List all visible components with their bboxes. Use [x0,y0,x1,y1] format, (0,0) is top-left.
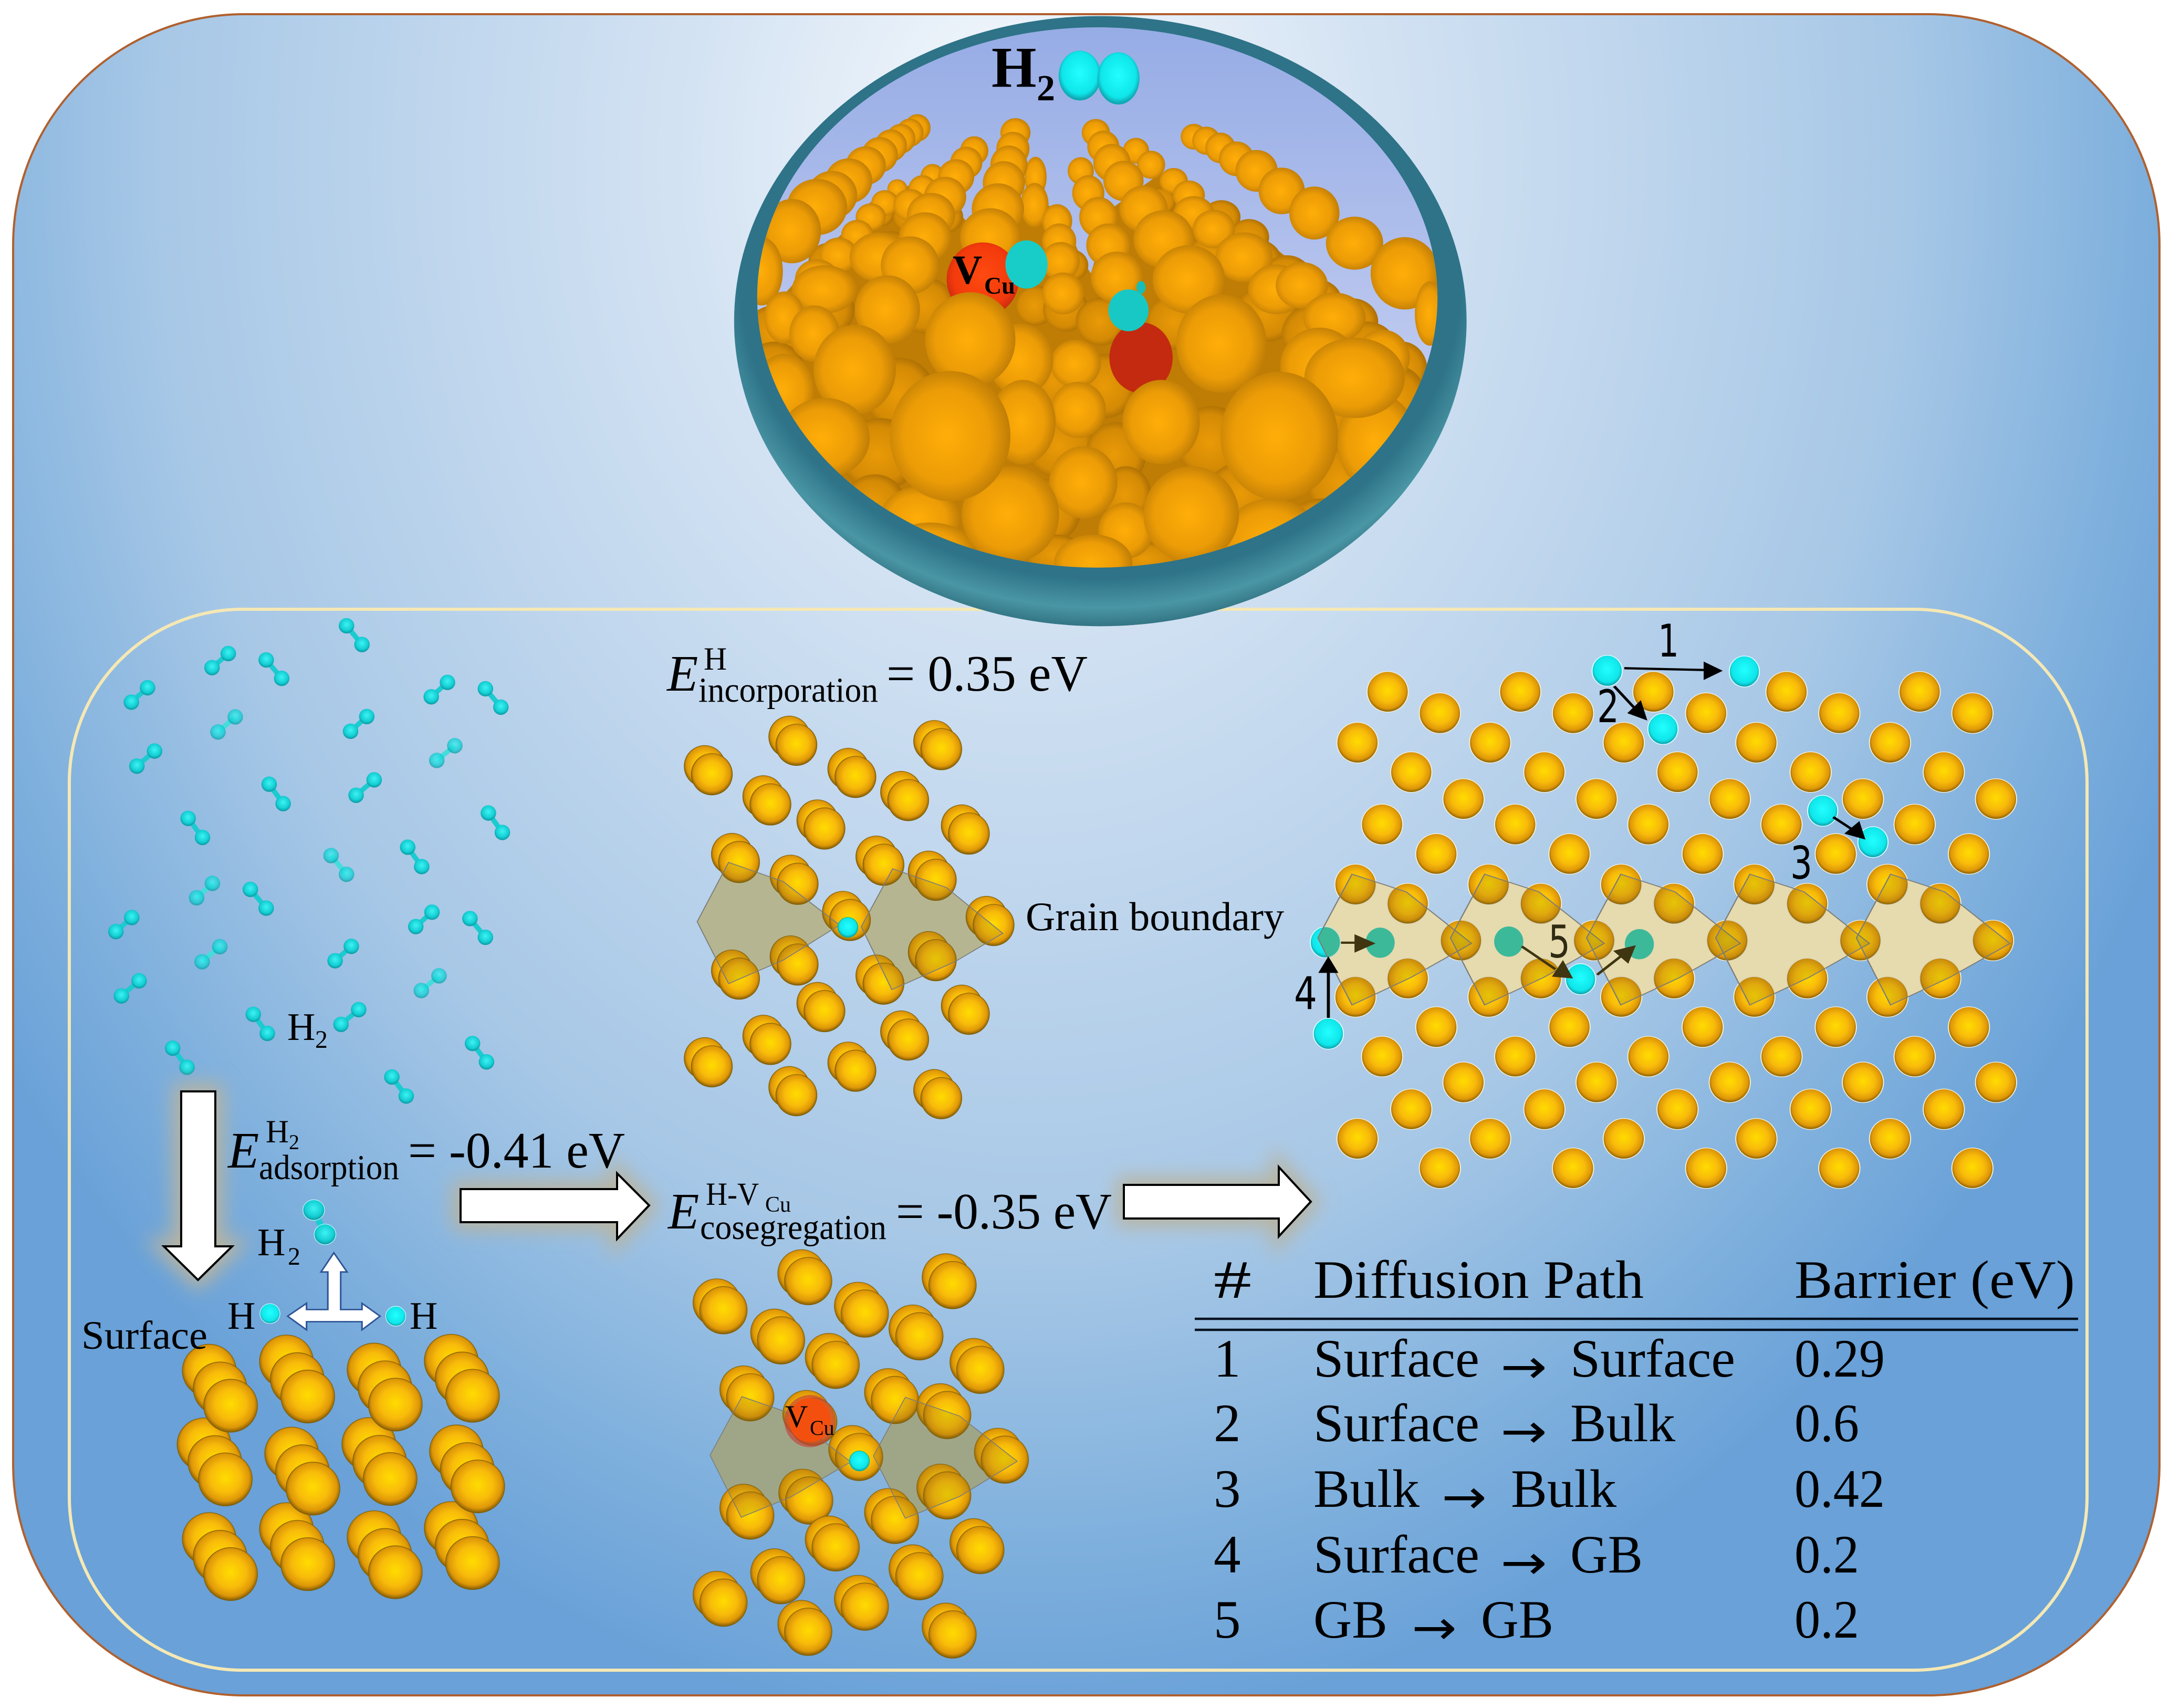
formula: cosegregation energy: E [667,1183,699,1240]
dissociated H atoms [260,1304,406,1326]
row 1: → [1500,1339,1547,1394]
surface slab [177,1200,505,1601]
row 3 [1214,1459,1885,1525]
row 2: 0.6 [1795,1393,1859,1453]
formula: adsorption energy: 2 [289,1130,299,1154]
formula: adsorption energy: adsorption [259,1148,399,1187]
table header: Barrier (eV) [1795,1250,2075,1310]
row 1 [1214,1329,1885,1394]
hydrogen atoms on paths [1313,655,1888,1049]
row 5: → [1412,1600,1457,1655]
row 4 [1214,1525,1859,1590]
formula: cosegregation energy [667,1177,1112,1247]
row 1: Surface [1313,1329,1479,1389]
T-shaped dissociation arrow [288,1253,380,1330]
lens label V_Cu: Cu [984,272,1015,299]
lens ring [734,16,1467,626]
label H2 gas [287,1006,328,1054]
table header [1214,1250,2075,1310]
row 5: GB [1313,1590,1387,1650]
hydrogen atoms in grain boundary [1310,926,1654,959]
copper atoms [177,1334,505,1601]
row 4: 4 [1214,1525,1240,1585]
arrow: gas to surface [164,1091,232,1280]
formula: incorporation energy: = 0.35 eV [886,645,1088,702]
row 3: Bulk [1511,1459,1616,1519]
diffusion arrows [1318,662,1865,1018]
formula: adsorption energy: = -0.41 eV [408,1122,625,1179]
label H right: H [410,1295,437,1338]
label H left: H [227,1295,255,1338]
lens: copper surface close-up [734,16,1467,626]
copper atoms [684,716,1014,1119]
vacancy cosegregation structure [693,1249,1029,1658]
label H2 gas: H [287,1006,315,1049]
diffusion lattice [1310,655,2017,1189]
label H2 at surface [257,1221,300,1270]
diffusion table [1195,1250,2078,1655]
formula: incorporation energy: incorporation [698,671,878,710]
formula: cosegregation energy: = -0.35 eV [896,1183,1112,1240]
lens label H2: H [992,35,1037,99]
grain boundary polygons [697,862,1003,990]
lens label H2: 2 [1037,68,1055,109]
arrow: cosegregation to diffusion [1124,1167,1311,1236]
row 4: GB [1570,1525,1643,1585]
lens label V_Cu [953,247,1015,299]
row 1: 0.29 [1795,1329,1885,1389]
row 3: 0.42 [1795,1459,1885,1519]
table header: Diffusion Path [1313,1250,1644,1310]
grain boundary polygon base [710,1397,1017,1518]
formula: incorporation energy [666,642,1088,710]
inner panel border [69,609,2087,1670]
formula: adsorption energy [227,1115,625,1187]
row 4: → [1500,1535,1547,1590]
formula: incorporation energy: E [666,645,698,702]
row 4: 0.2 [1795,1525,1859,1585]
row 3: Bulk [1313,1459,1420,1519]
formula: adsorption energy: H [266,1115,289,1150]
row 5 [1214,1590,1859,1655]
row 5: 5 [1214,1590,1240,1650]
label surface: Surface [81,1314,207,1358]
row 3: 3 [1214,1459,1240,1519]
vacancy atom [785,1395,836,1447]
grain boundary polygons [1318,874,2010,1005]
table header: # [1214,1250,1251,1310]
row 2: → [1500,1404,1547,1459]
row 5: 0.2 [1795,1590,1859,1650]
hydrogen bond stub [1136,281,1145,294]
red vacancy atom lower [1109,322,1173,393]
hydrogen atom upper [1005,241,1048,288]
row 1: Surface [1570,1329,1735,1389]
grain boundary incorporation structure [684,716,1014,1119]
small H2 molecule [303,1200,336,1245]
row 4: Surface [1313,1525,1479,1585]
lens label H2 [992,35,1055,109]
copper atoms [1335,672,2017,1189]
arrow: adsorption to cosegregation [461,1173,649,1239]
label V_Cu: Cu [810,1416,834,1440]
table rules [1195,1319,2078,1330]
H2 gas molecules [108,618,510,1104]
path number 3: 3 [1790,837,1812,890]
lens label V_Cu: V [953,247,982,293]
path number 4: 4 [1294,967,1317,1020]
red vacancy atom upper [946,242,1019,316]
row 3: → [1442,1470,1487,1525]
row 2: Bulk [1570,1393,1675,1453]
copper atoms [693,1249,1029,1658]
label V_Cu: V [785,1399,808,1434]
formula: cosegregation energy: Cu [765,1193,791,1217]
formula: adsorption energy: E [227,1122,259,1179]
row 2: 2 [1214,1393,1240,1453]
H2 molecule in lens [1059,50,1140,105]
row 5: GB [1481,1590,1553,1650]
label grain boundary: Grain boundary [1026,894,1285,939]
formula: cosegregation energy: cosegregation [700,1208,886,1247]
grain boundary polygon base [697,862,1003,990]
path number 1: 1 [1658,615,1679,668]
grain boundary polygon base [1318,874,2010,1005]
hydrogen atom [849,1451,870,1471]
hydrogen atom lower [1109,289,1149,331]
hydrogen atom [838,918,858,938]
path number 2: 2 [1597,681,1619,733]
formula: incorporation energy: H [704,642,727,677]
grain boundary polygons [710,1397,1017,1518]
label V_Cu [785,1399,834,1440]
label H2 at surface: 2 [288,1243,300,1270]
row 2: Surface [1313,1393,1479,1453]
label H2 gas: 2 [315,1026,328,1054]
path number 5: 5 [1548,916,1570,968]
row 2 [1214,1393,1859,1459]
row 1: 1 [1214,1329,1240,1389]
lens scene [734,24,1445,591]
label H2 at surface: H [257,1221,285,1264]
formula: cosegregation energy: H-V [706,1177,759,1212]
